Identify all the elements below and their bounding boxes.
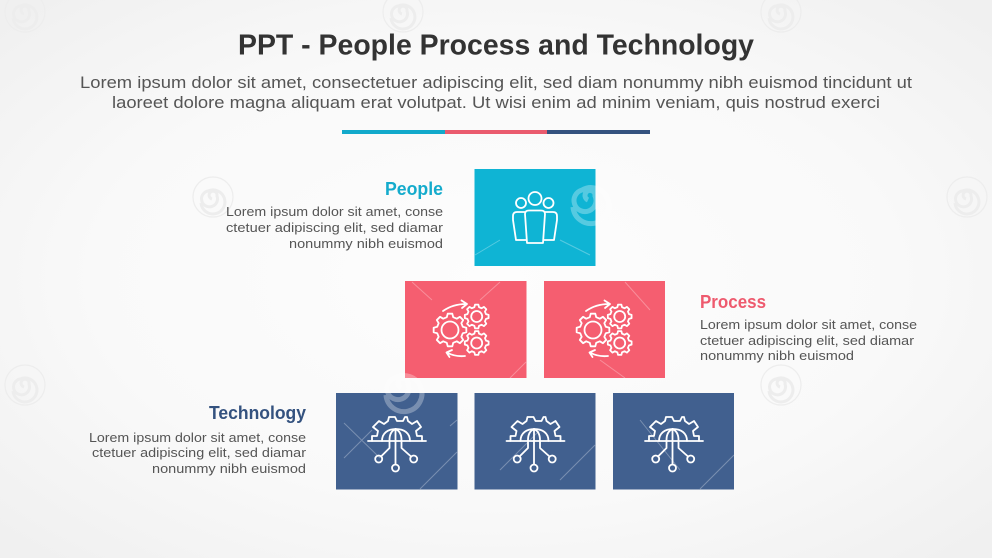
people text block: ctetuer adipiscing elit, sed diamar xyxy=(226,221,443,235)
intro text: laoreet dolore magna aliquam erat volutpat. Ut wisi enim ad minim veniam, quis nostrud exerci xyxy=(112,93,880,112)
technology box 2 xyxy=(474,393,596,490)
technology box 3 xyxy=(613,393,734,490)
technology text block: Lorem ipsum dolor sit amet, conse xyxy=(89,431,306,445)
watermark overlay on boxes xyxy=(344,188,734,489)
technology box 1 xyxy=(336,393,458,490)
people text block: Lorem ipsum dolor sit amet, conse xyxy=(226,205,443,219)
process text block: ctetuer adipiscing elit, sed diamar xyxy=(700,334,914,348)
process text block xyxy=(700,291,917,363)
process text block: Lorem ipsum dolor sit amet, conse xyxy=(700,318,917,332)
watermark spirals on background xyxy=(5,0,987,405)
title: PPT - People Process and Technology xyxy=(238,30,754,62)
people text block: People xyxy=(385,178,443,199)
icon: gear circuit xyxy=(506,417,564,472)
process text block: Process xyxy=(700,291,766,312)
icon: gear circuit xyxy=(645,417,703,472)
people text block xyxy=(226,178,443,251)
process box 1 xyxy=(405,281,526,378)
icon: people group xyxy=(513,192,557,243)
people text block: nonummy nibh euismod xyxy=(289,237,443,251)
technology text block: Technology xyxy=(209,402,307,423)
process text block: nonummy nibh euismod xyxy=(700,349,854,363)
technology text block xyxy=(89,402,307,476)
technology text block: nonummy nibh euismod xyxy=(152,462,306,476)
technology text block: ctetuer adipiscing elit, sed diamar xyxy=(92,446,306,460)
icon: gear circuit xyxy=(368,417,426,472)
icon: gears with arrows xyxy=(434,300,489,357)
icon: gears with arrows xyxy=(577,300,632,357)
process box 2 xyxy=(544,281,665,378)
people box xyxy=(474,169,596,266)
intro text xyxy=(80,73,912,112)
intro text: Lorem ipsum dolor sit amet, consectetuer adipiscing elit, sed diam nonummy nibh euismod tincidunt ut xyxy=(80,73,912,92)
tricolor divider xyxy=(342,130,650,134)
